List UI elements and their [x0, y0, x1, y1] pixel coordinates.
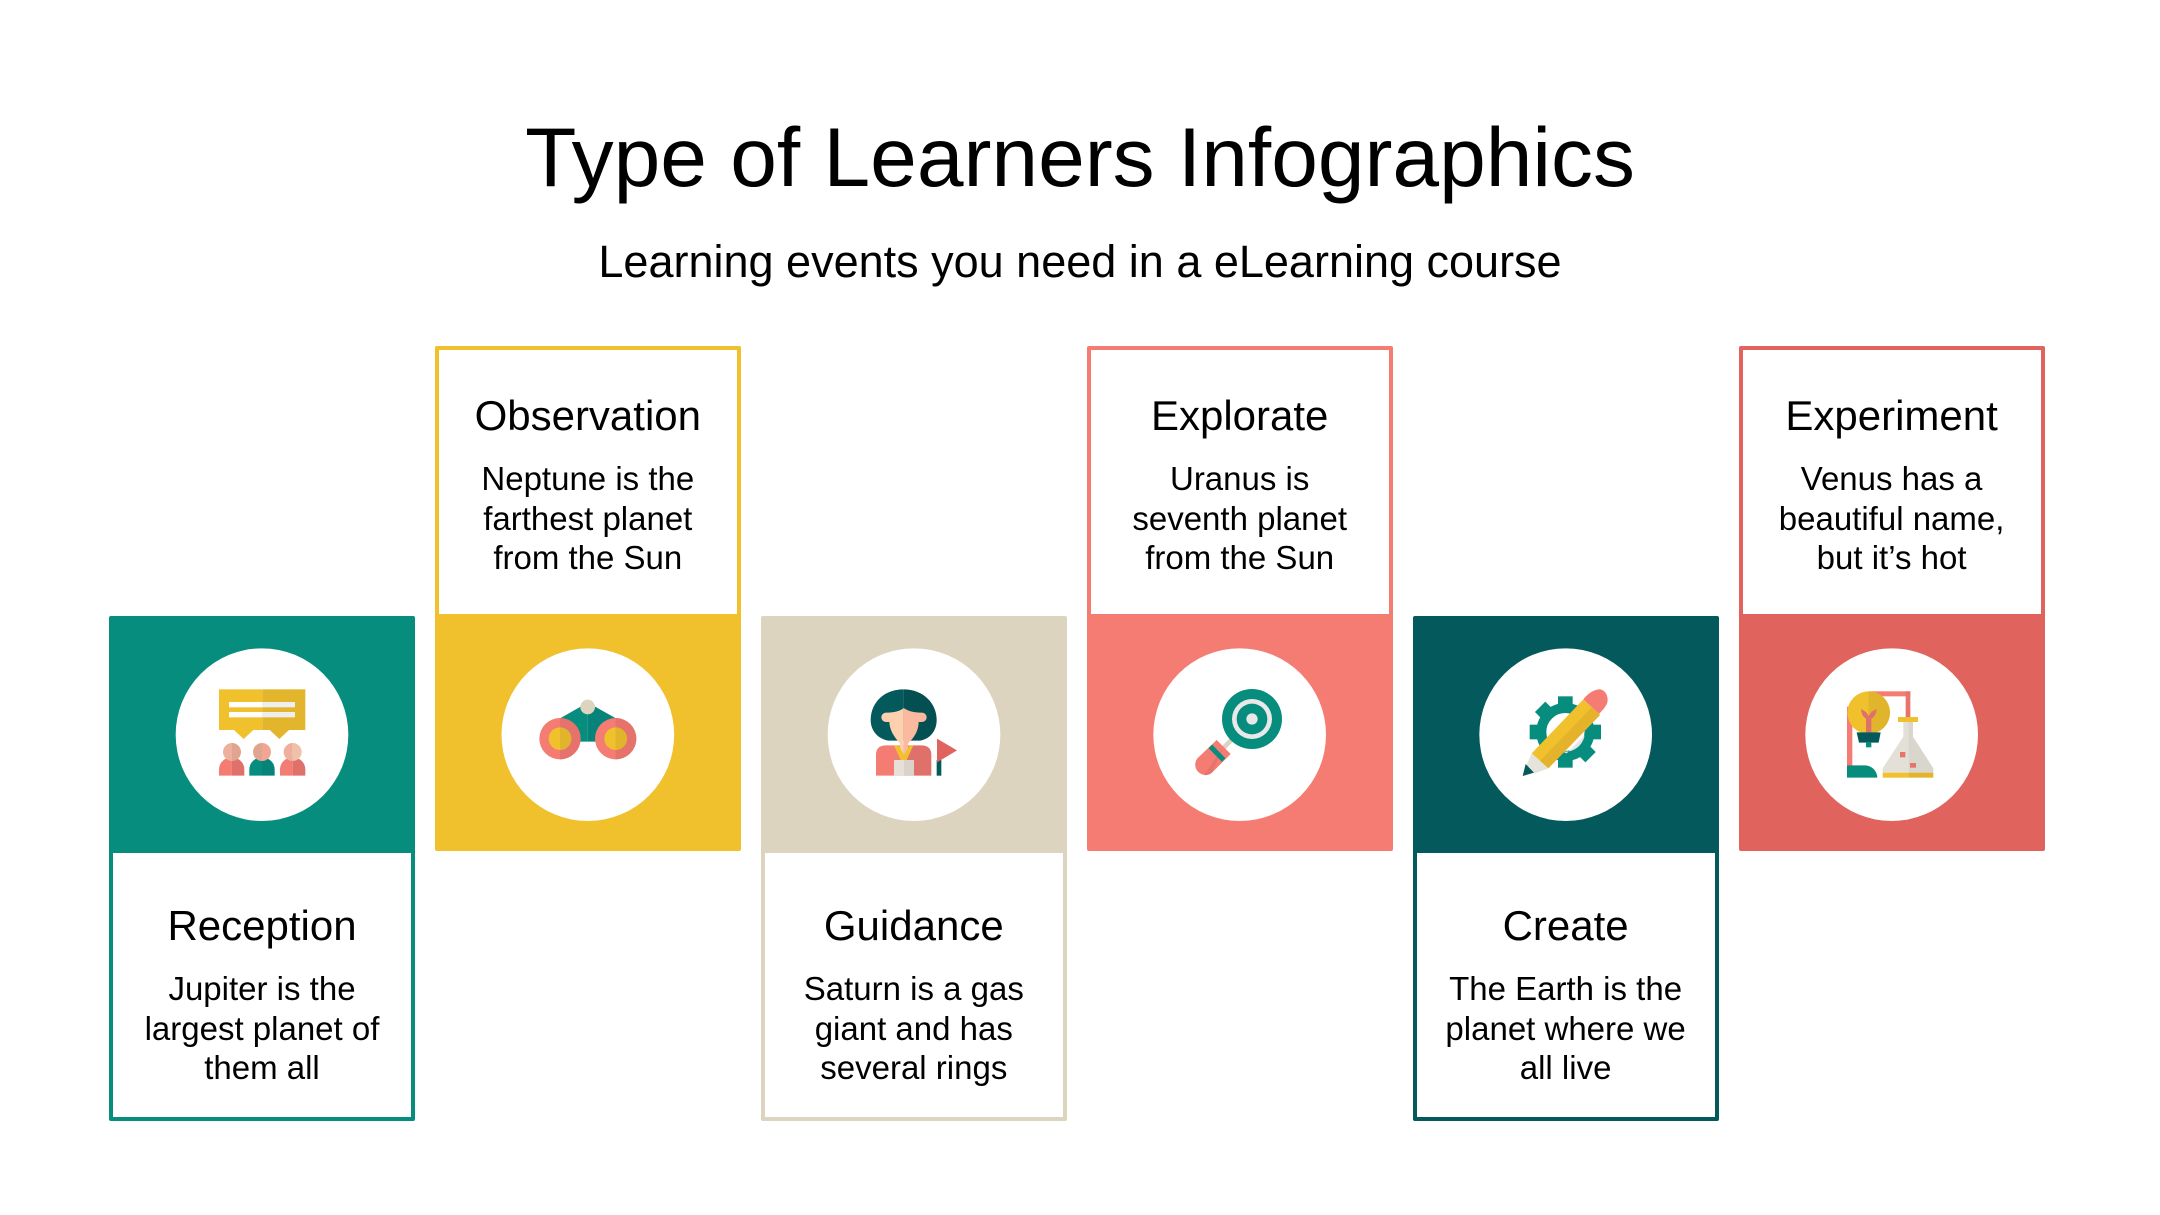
- panel: Observation: [435, 346, 741, 851]
- icon: binoculars: [502, 648, 674, 821]
- panel: Reception: [109, 616, 415, 1121]
- heading: Experiment: [1785, 392, 1998, 439]
- body text: seventh planet: [1132, 500, 1347, 537]
- subtitle: Learning events you need in a eLearning course: [598, 236, 1562, 287]
- body text: several rings: [820, 1049, 1007, 1086]
- icon: magnifying glass: [1153, 648, 1326, 821]
- body text: [1132, 460, 1347, 576]
- body text: The Earth is the: [1449, 970, 1682, 1007]
- body text: all live: [1520, 1049, 1611, 1086]
- title: Type of Learners Infographics: [525, 110, 1635, 204]
- text box outline: [1087, 346, 1393, 626]
- colour block: [435, 614, 741, 851]
- body text: Neptune is the: [481, 460, 694, 497]
- body text: planet where we: [1445, 1010, 1686, 1047]
- text box outline: [761, 841, 1067, 1121]
- panel: Guidance: [761, 616, 1067, 1121]
- body text: beautiful name,: [1779, 500, 2004, 537]
- text box outline: [109, 841, 415, 1121]
- heading: Observation: [475, 392, 701, 439]
- panel: Create: [1413, 616, 1719, 1121]
- panel: Experiment: [1739, 346, 2045, 851]
- panel: Explorate: [1087, 346, 1393, 851]
- heading: Reception: [167, 902, 357, 949]
- body text: them all: [204, 1049, 320, 1086]
- heading: Explorate: [1151, 392, 1328, 439]
- icon: light bulb and flask: [1805, 648, 1978, 821]
- body text: Saturn is a gas: [804, 970, 1024, 1007]
- icon: audience with speech bubble: [176, 648, 348, 821]
- body text: farthest planet: [483, 500, 692, 537]
- body text: [145, 970, 380, 1086]
- body text: from the Sun: [1145, 539, 1334, 576]
- body text: largest planet of: [145, 1010, 379, 1047]
- colour block: [761, 616, 1067, 853]
- body text: [481, 460, 694, 576]
- text box outline: [1739, 346, 2045, 626]
- heading: Create: [1503, 902, 1629, 949]
- body text: but it’s hot: [1817, 539, 1966, 576]
- colour block: [1087, 614, 1393, 851]
- heading: Guidance: [824, 902, 1004, 949]
- icon: guide with flag: [828, 648, 1000, 821]
- body text: [1445, 970, 1686, 1086]
- body text: Venus has a: [1801, 460, 1982, 497]
- body text: [1779, 460, 2004, 576]
- text box outline: [1413, 841, 1719, 1121]
- body text: Jupiter is the: [168, 970, 356, 1007]
- colour block: [1413, 616, 1719, 853]
- body text: Uranus is: [1170, 460, 1309, 497]
- icon: gear and pencil: [1479, 648, 1652, 821]
- colour block: [109, 616, 415, 853]
- text box outline: [435, 346, 741, 626]
- body text: giant and has: [815, 1010, 1013, 1047]
- body text: [804, 970, 1024, 1086]
- colour block: [1739, 614, 2045, 851]
- body text: from the Sun: [493, 539, 682, 576]
